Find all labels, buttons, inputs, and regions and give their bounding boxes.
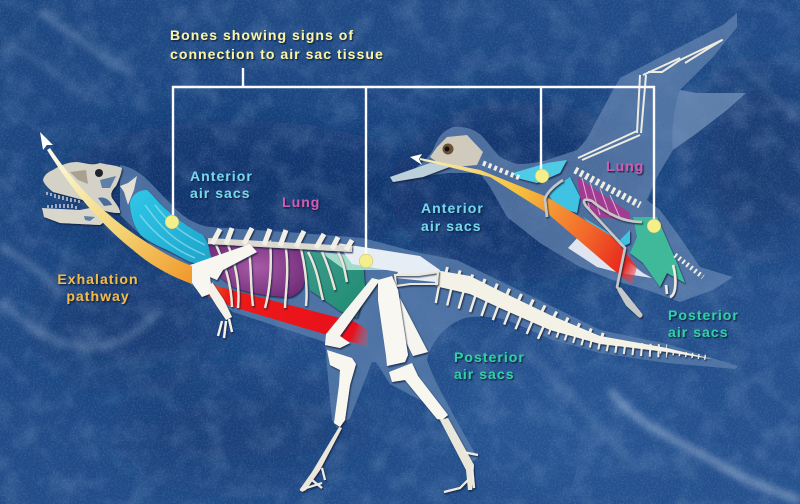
heading: [170, 27, 384, 62]
label: anterior air sacs, dinosaur: air sacs: [190, 185, 251, 201]
exhalation pathway red band: [205, 283, 368, 347]
bird leg and furcula bones: [545, 180, 675, 315]
skull: [43, 162, 122, 213]
left lower leg: [300, 350, 356, 492]
connection points: [165, 169, 661, 268]
label: posterior air sacs, dinosaur: Posterior: [454, 349, 525, 365]
right lower leg: [389, 363, 478, 492]
label: exhalation pathway: Exhalation: [57, 271, 139, 287]
lower jaw: [42, 208, 107, 225]
label: exhalation pathway: pathway: [66, 288, 130, 304]
lung, dinosaur: [208, 238, 305, 297]
dinosaur body outline: [120, 165, 738, 462]
label: anterior air sacs, bird: air sacs: [421, 218, 482, 234]
bird skull: [430, 135, 483, 168]
posterior air sacs, bird: [630, 217, 685, 287]
exhalation pathway arrow, dinosaur: [40, 132, 192, 284]
belly region: [568, 235, 652, 278]
lung, bird: [577, 177, 630, 220]
exhalation pathway, bird: [420, 158, 637, 285]
neck vertebrae: [120, 176, 137, 205]
label: anterior air sacs, dinosaur: Anterior: [190, 168, 253, 184]
ribs: [214, 240, 347, 308]
label: anterior air sacs, bird: [421, 200, 484, 234]
label: exhalation pathway: [57, 271, 139, 304]
bird wing bones: [578, 40, 722, 160]
label: posterior air sacs, dinosaur: [454, 349, 525, 382]
connector lines: [173, 68, 654, 260]
femur: [378, 276, 408, 366]
pelvis and pubis: [325, 272, 438, 356]
heading: Bones showing signs of: [170, 27, 354, 43]
bird spine: [483, 163, 703, 277]
tail skeleton: [435, 270, 712, 359]
label: anterior air sacs, dinosaur: [190, 168, 253, 201]
label: posterior air sacs, bird: [668, 307, 739, 340]
pelvis region: [337, 243, 440, 282]
bird: [390, 13, 746, 315]
beak: [390, 163, 452, 182]
dinosaur: [42, 162, 738, 492]
heading: connection to air sac tissue: [170, 46, 384, 62]
posterior air sac, dinosaur: [303, 250, 365, 318]
arrowhead, bird: [410, 154, 422, 165]
label: posterior air sacs, bird: air sacs: [668, 324, 729, 340]
label: anterior air sacs, bird: Anterior: [421, 200, 484, 216]
anterior air sac, dinosaur: [130, 190, 212, 264]
anterior air sacs, bird: [513, 160, 630, 247]
label: posterior air sacs, dinosaur: air sacs: [454, 366, 515, 382]
label: posterior air sacs, bird: Posterior: [668, 307, 739, 323]
bird body and wing outline: [390, 13, 746, 302]
eye: [442, 144, 454, 154]
label: lung, bird: Lung: [606, 158, 644, 174]
arm bones: [190, 244, 257, 338]
teeth: [47, 192, 79, 209]
label: lung, dinosaur: Lung: [282, 194, 320, 210]
tail fan lobe: [672, 90, 746, 150]
spine, front: [208, 228, 352, 250]
